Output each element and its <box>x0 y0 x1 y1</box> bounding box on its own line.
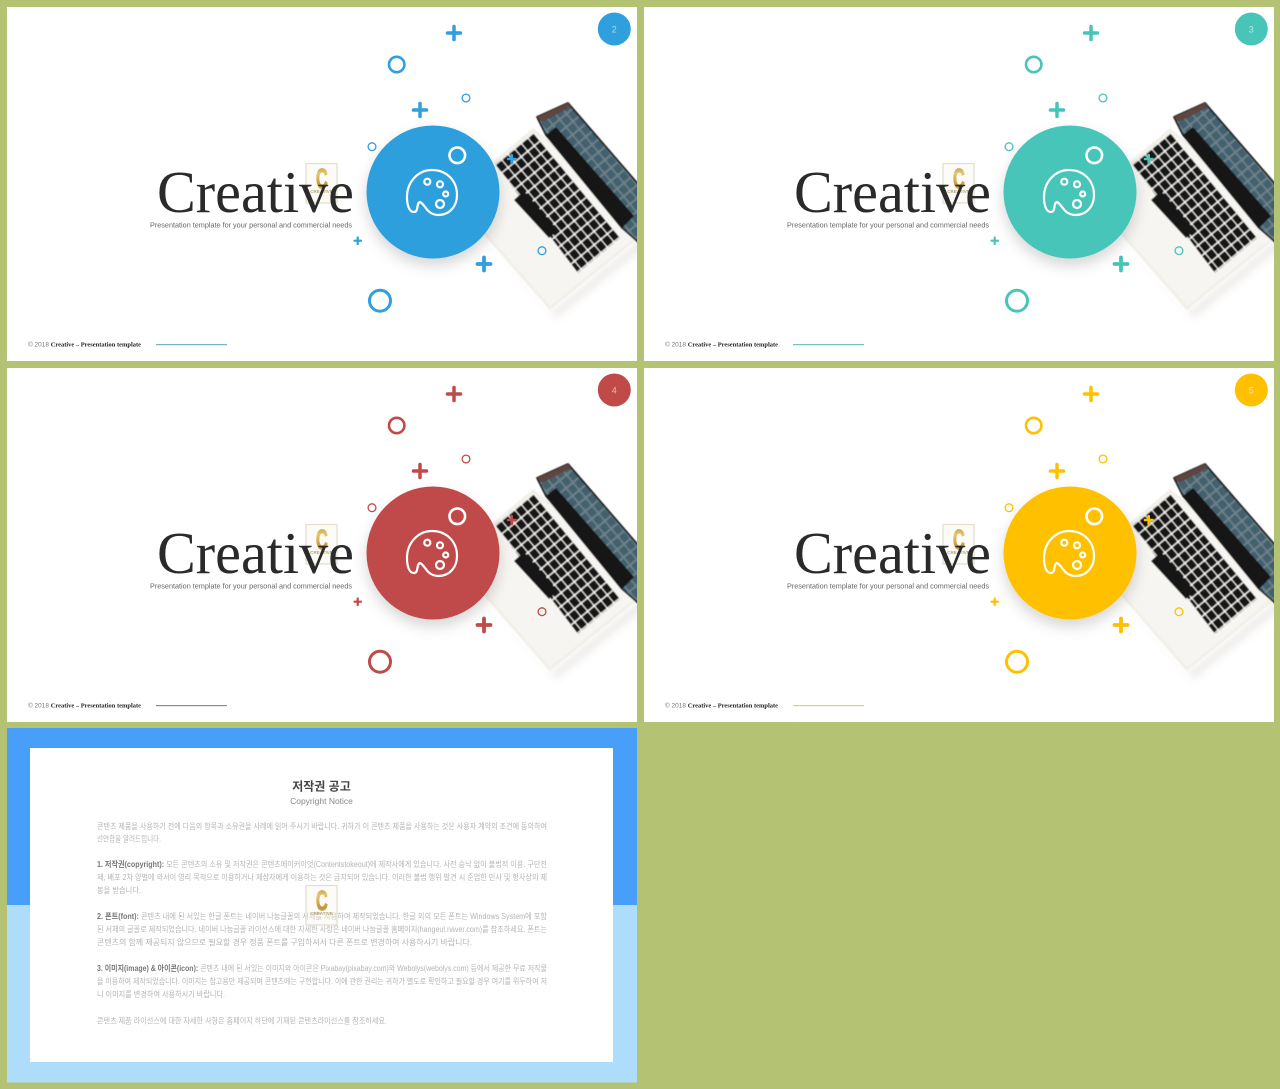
laptop photo <box>453 103 645 318</box>
page number badge <box>598 374 631 406</box>
notice body text: 콘텐츠 제품 라이선스에 대한 자세한 사항은 홈페이지 하단에 기재된 콘텐츠라이선스를 참조하세요. <box>97 1016 387 1026</box>
watermark logo: CREATIVE <box>947 550 970 555</box>
laptop photo <box>1090 464 1280 679</box>
notice body text: 3. 이미지(image) & 아이콘(icon): 콘텐츠 내에 된 서있는 이미지와 아이콘은 Pixabay(pixabay.com)와 Webolys(webolys.com) 등에서 제공한 무료 저작물 <box>97 963 547 973</box>
decorative plus signs and rings <box>354 26 546 311</box>
notice body text: 니 이미지를 변경하여 사용하시기 바랍니다. <box>97 989 225 999</box>
page number badge <box>1235 12 1268 46</box>
title: Creative <box>794 520 991 586</box>
page number badge: 5 <box>1249 386 1254 396</box>
footer text: © 2018 Creative – Presentation template <box>28 342 141 348</box>
white ring on circle <box>450 148 465 163</box>
footer text: © 2018 Creative – Presentation template <box>665 342 778 348</box>
notice body text: 선언함을 알려드립니다. <box>97 834 161 844</box>
watermark logo <box>306 884 337 925</box>
icon: palette <box>1044 531 1094 576</box>
page number badge <box>598 12 631 46</box>
notice subheading: Copyright Notice <box>290 796 353 806</box>
title: Creative <box>794 159 991 225</box>
laptop photo <box>453 464 645 679</box>
white ring on circle <box>450 508 465 524</box>
main colored circle <box>1004 486 1136 620</box>
icon: palette <box>1044 170 1094 215</box>
decorative plus signs and rings <box>992 388 1183 672</box>
footer line <box>156 705 227 706</box>
footer line <box>793 705 864 706</box>
watermark logo <box>306 523 337 564</box>
main colored circle <box>1004 126 1136 258</box>
watermark logo: CREATIVE <box>310 911 333 916</box>
watermark logo: CREATIVE <box>310 550 333 555</box>
footer text: © 2018 Creative – Presentation template <box>665 702 778 710</box>
watermark logo: C <box>316 523 328 555</box>
page number badge: 3 <box>1249 24 1254 34</box>
panel: slide 3 teal <box>644 7 1274 361</box>
footer text: © 2018 Creative – Presentation template <box>28 702 141 710</box>
watermark logo: C <box>953 162 965 194</box>
watermark logo: CREATIVE <box>310 189 333 194</box>
footer line <box>793 344 864 345</box>
panel: copyright notice slide <box>7 728 637 1082</box>
white ring on circle <box>1086 148 1102 163</box>
main colored circle <box>366 486 500 620</box>
watermark logo <box>943 162 974 203</box>
title: Creative <box>157 159 354 225</box>
watermark logo: CREATIVE <box>947 189 970 194</box>
icon: palette <box>407 170 457 215</box>
notice body text <box>97 821 548 1026</box>
panel: slide 2 blue <box>7 7 637 361</box>
notice body text: 콘텐츠 제품을 사용하기 전에 다음의 항목과 소유권을 사례에 읽어 주시기 바랍니다. 귀하가 이 콘텐츠 제품을 사용하는 것은 사용자 계약의 조건에 동의하여 <box>97 821 547 831</box>
page number badge: 4 <box>612 386 617 396</box>
subtitle: Presentation template for your personal and commercial needs <box>150 222 353 230</box>
watermark logo: C <box>953 523 965 555</box>
main colored circle <box>366 126 500 258</box>
decorative plus signs and rings <box>354 388 546 672</box>
watermark logo: C <box>316 884 328 916</box>
watermark logo: C <box>316 162 328 194</box>
white ring on circle <box>1086 508 1102 524</box>
subtitle: Presentation template for your personal and commercial needs <box>787 222 990 230</box>
laptop photo <box>1090 103 1280 318</box>
notice body text: 봉을 받습니다. <box>97 885 141 895</box>
notice body text: 제, 배포 2차 양벌에 와서이 영리 목적으로 이용하거나 제삼자에게 이용하는 것은 금지되어 있습니다. 이러한 불법 행위 발견 시 준엄한 민사 및 형사상의 제 <box>97 872 547 882</box>
notice body text: 2. 폰트(font): 콘텐츠 내에 된 서있는 한글 폰트는 네이버 나눔글꼴의 서체를 사용하여 제작되었습니다. 한글 외의 모든 폰트는 Windows System에 포함 <box>97 911 548 921</box>
page number badge: 2 <box>612 24 617 34</box>
title: Creative <box>157 520 354 586</box>
notice body text: 1. 저작권(copyright): 모든 콘텐츠의 소유 및 저작권은 콘텐츠메이커이엇(Contentstokeout)에 제작사에게 있습니다. 사전 승낙 없이 불법적 이용, 구단전 <box>97 859 547 869</box>
notice body text: 을 이용하여 제작되었습니다. 이미지는 참고용만 제공되며 콘텐츠에는 구현합니다. 이에 관한 권리는 귀하가 별도로 확인하고 필요할 경우 여기를 위두하여 저 <box>97 976 547 986</box>
panel: slide 5 yellow <box>644 368 1274 722</box>
icon: palette <box>407 531 457 576</box>
page number badge <box>1235 374 1268 406</box>
watermark logo <box>306 162 337 203</box>
subtitle: Presentation template for your personal and commercial needs <box>150 584 353 590</box>
notice heading: 저작권 공고 <box>292 778 351 794</box>
watermark logo <box>943 523 974 564</box>
notice body text: 된 서체의 글꼴로 제작되었습니다. 네이버 나눔글꼴 라이선스에 대한 자세한 사항은 네이버 나눔글꼴 홈페이지(hangeul.naver.com)를 참조하세요. 폰트는 <box>97 924 547 934</box>
subtitle: Presentation template for your personal and commercial needs <box>787 584 990 590</box>
panel: slide 4 red <box>7 368 637 722</box>
decorative plus signs and rings <box>992 26 1183 311</box>
footer line <box>156 344 227 345</box>
notice body text: 콘텐츠의 함께 제공되지 않으므로 필요할 경우 정품 폰트를 구입하셔서 다른 폰트로 변경하여 사용하시기 바랍니다. <box>97 937 472 947</box>
